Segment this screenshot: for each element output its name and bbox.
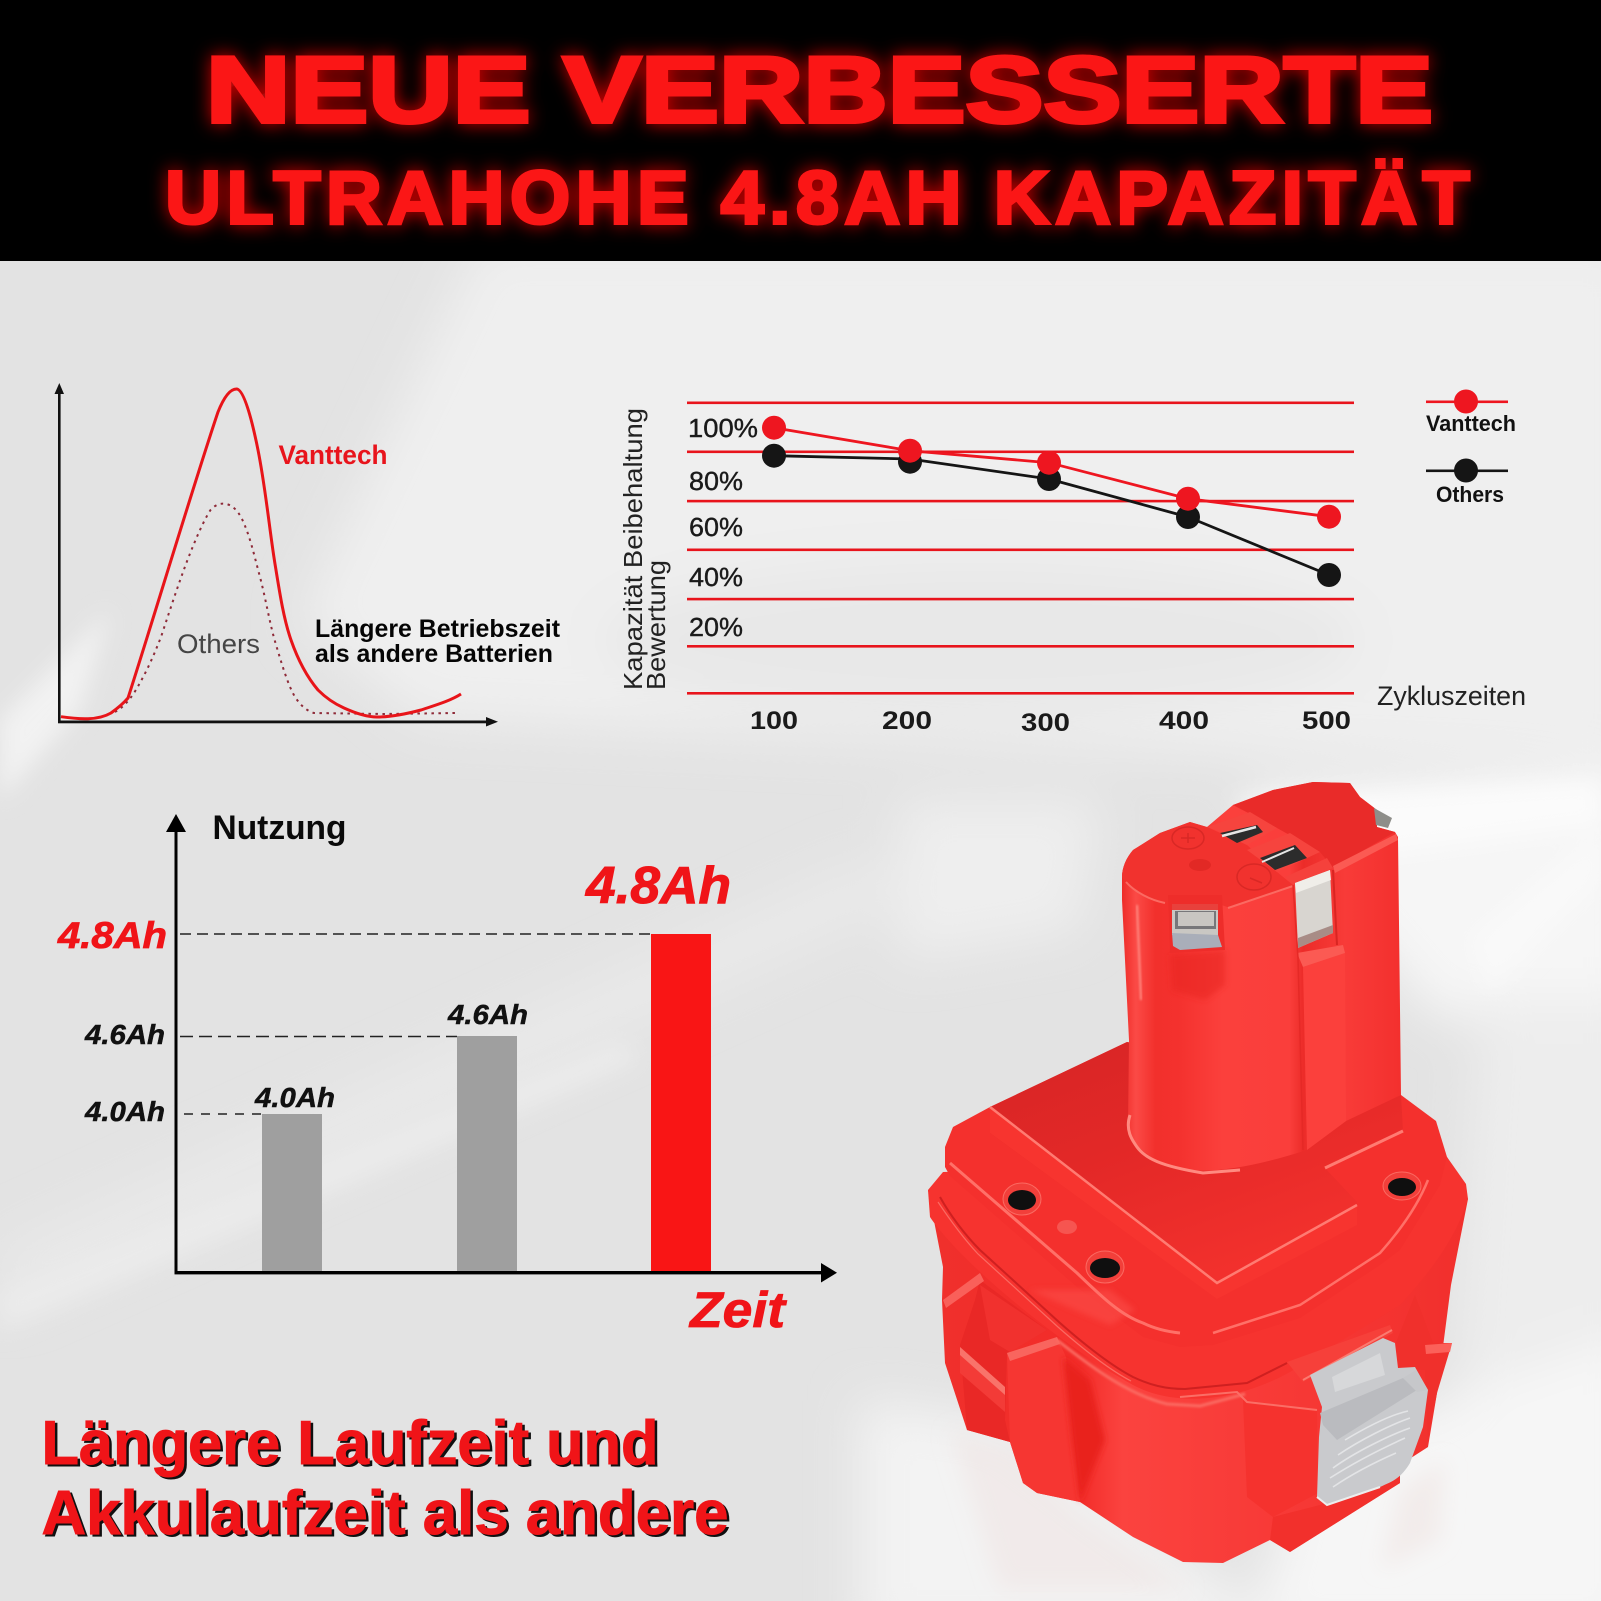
y axis title [618,408,671,690]
platform highlights [990,1107,1357,1283]
chart: capacity bars [57,809,837,1338]
red curve: Vanttech [61,389,461,719]
rim groove [940,1197,1287,1389]
x axis cycle labels: 200 [882,707,932,735]
rear block [1233,782,1395,868]
screw holes [1003,1172,1421,1283]
rear terminal tab [1374,808,1392,828]
callout: longer runtime: Längere Betriebszeit [315,615,561,643]
y axis title: Kapazität Beibehaltung [618,408,648,690]
grip fin [1007,1337,1105,1502]
legend: Others [1426,458,1508,507]
y tick labels: 4.6Ah [84,1019,165,1050]
tower shadow under window [1170,950,1225,1000]
grid lines [687,402,1354,695]
y axis percent labels: 20% [689,612,743,642]
plate light facet [1030,1290,1135,1325]
bar value labels: 4.0Ah [254,1082,335,1113]
x axis cycle labels: 400 [1159,707,1209,735]
y tick labels [57,915,167,1127]
y axis title: Bewertung [641,560,671,690]
series: others [762,444,1341,587]
y tick labels: 4.8Ah [57,915,167,956]
metal contact [1285,858,1333,948]
x axis cycle labels: 300 [1021,709,1070,737]
chart: runtime discharge curves [54,383,561,726]
y axis percent labels [688,413,758,642]
platform front face [990,1107,1357,1299]
lip above latch [1287,1325,1393,1382]
y axis percent labels: 60% [689,512,743,542]
label: Nutzung: Nutzung [212,809,346,847]
bar: 4.8Ah [651,934,711,1272]
title line 1: NEUE VERBESSERTE [206,37,1433,142]
label: Others: Others [177,629,260,659]
tower base ring highlight [1128,1115,1240,1173]
header band [0,0,1601,261]
headline: longer runtime [42,1409,731,1550]
label: Vanttech: Vanttech [278,440,388,470]
legend: Others: Others [1436,482,1504,507]
rim lower highlight [1057,1340,1245,1406]
left grip recess [943,1273,1047,1442]
y and x axes [54,383,498,726]
x axis cycle labels: 500 [1302,707,1351,735]
x axis cycle labels [750,707,1351,737]
y axis percent labels: 40% [689,562,743,592]
tower left streak [1137,905,1141,1000]
lower body [928,1157,1468,1563]
headline: longer runtime: Akkulaufzeit als andere [42,1479,728,1548]
tower body [1122,782,1401,1171]
dashed guides [180,934,651,1114]
x axis title: Zykluszeiten [1377,681,1526,711]
rim band [928,1157,1468,1399]
legend: Vanttech: Vanttech [1426,411,1516,436]
raised platform [990,1042,1403,1299]
top face edge highlight [1126,882,1293,908]
headline: longer runtime: Längere Laufzeit und [42,1409,658,1478]
grip bar [960,1347,1005,1412]
callout: longer runtime [315,615,561,668]
plate edge highlights [950,1163,1180,1333]
bar value labels: 4.8Ah [585,857,731,915]
y tick labels: 4.0Ah [84,1096,165,1127]
floor reflections [950,1430,1445,1590]
y axis percent labels: 80% [689,466,743,496]
y axis percent labels: 100% [688,413,758,443]
top plate [945,1042,1447,1347]
legend: Vanttech [1426,390,1516,436]
product: red battery pack [928,782,1468,1590]
headline: longer runtime: Längere Laufzeit und [44,1411,661,1480]
title line 2: ULTRAHOHE 4.8AH KAPAZITÄT [165,156,1475,240]
tower top face [1122,822,1293,908]
axes [166,814,837,1282]
side panel near latch [1180,1295,1452,1552]
series: Vanttech [762,416,1341,529]
side contact window [1168,895,1225,953]
callout: longer runtime: als andere Batterien [315,640,553,668]
bar value labels: 4.6Ah [447,999,528,1030]
grey latch [1287,1325,1428,1505]
label: Zeit: Zeit [688,1282,787,1338]
bar value labels [254,857,731,1113]
headline: longer runtime: Akkulaufzeit als andere [44,1481,731,1550]
bar: 4.0Ah [262,1114,322,1272]
x axis cycle labels: 100 [750,707,798,735]
dotted curve: others [115,504,457,714]
bar: 4.6Ah [457,1036,517,1272]
terminal slots [1172,812,1320,890]
chart: capacity retention vs cycles [618,390,1526,737]
tower rail [1293,870,1346,1150]
